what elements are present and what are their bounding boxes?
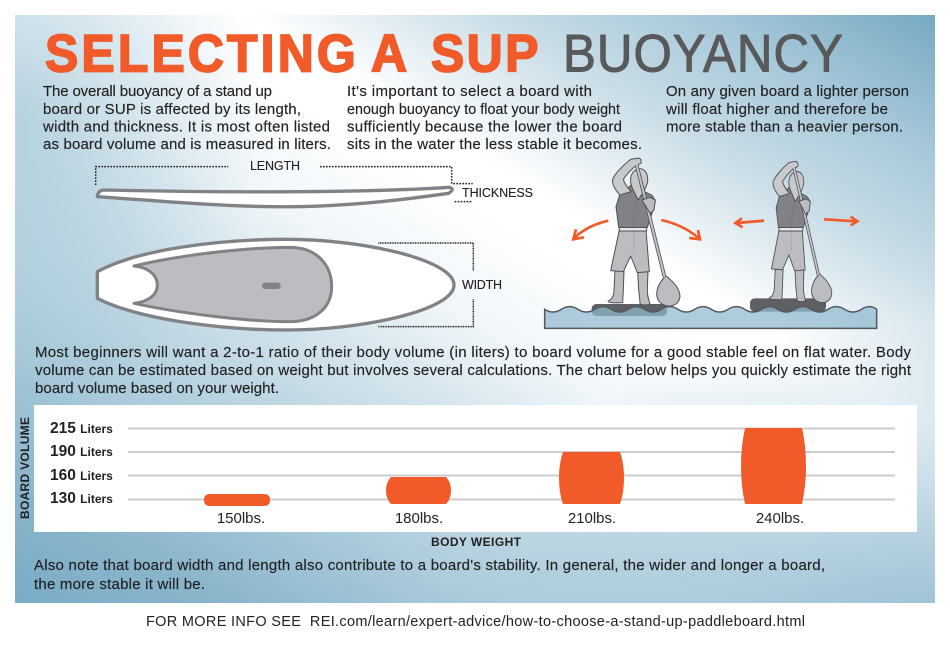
intro text: lighter person: will float higher and therefore be <box>665 101 888 118</box>
y axis title: BOARD VOLUME <box>18 417 32 519</box>
title: A <box>371 24 407 83</box>
water <box>545 307 877 328</box>
diagram: board top view with width: WIDTH <box>462 278 502 292</box>
y axis labels: 215 Liters <box>50 420 113 437</box>
arrows lighter paddler <box>735 217 857 227</box>
chart: board volume by body weight <box>18 405 917 532</box>
ratio paragraph: board volume based on your weight. <box>35 380 279 397</box>
title: SELECTING <box>45 24 356 83</box>
title: SUP <box>431 24 538 83</box>
board under heavier paddler <box>592 304 667 316</box>
diagram: board side view with length and thickness: THICKNESS <box>462 186 533 200</box>
bar 240 lbs <box>741 428 806 504</box>
closing note: the more stable it will be. <box>34 576 205 593</box>
board under lighter paddler <box>750 298 826 312</box>
intro text: lighter person: more stable than a heavier person. <box>666 118 903 136</box>
x axis labels: 180lbs. <box>395 510 443 527</box>
diagram: board top view with width <box>97 239 502 330</box>
intro text: overall buoyancy: width and thickness. It is most often listed <box>42 118 330 136</box>
ratio paragraph <box>35 344 912 397</box>
closing note: Also note that board width and length also contribute to a board's stability. In general, the wider and longer a board, <box>34 557 825 574</box>
ratio paragraph: volume can be estimated based on weight but involves several calculations. The chart below helps you quickly estimate the right <box>35 362 912 379</box>
intro text: enough buoyancy: It's important to select a board with <box>347 83 592 100</box>
diagram: board side view with length and thickness <box>96 159 533 207</box>
heavier paddler <box>608 158 680 306</box>
footer source line: FOR MORE INFO SEE REI.com/learn/expert-advice/how-to-choose-a-stand-up-paddleboard.html <box>146 614 805 630</box>
y axis labels <box>50 420 113 507</box>
intro text: overall buoyancy <box>42 83 331 153</box>
intro text: enough buoyancy <box>347 83 642 153</box>
intro text: overall buoyancy: as board volume and is measured in liters. <box>43 136 331 153</box>
x axis title: BODY WEIGHT <box>431 535 522 549</box>
x axis labels <box>217 510 804 527</box>
intro text: enough buoyancy: sufficiently because the lower the board <box>347 118 622 136</box>
arrows heavier paddler <box>573 220 700 239</box>
bar 150 lbs <box>204 494 270 506</box>
grid lines <box>128 428 895 500</box>
y axis labels: 160 Liters <box>50 467 113 484</box>
lighter paddler <box>769 161 832 303</box>
title: BUOYANCY <box>563 24 843 83</box>
illustration: paddlers on water with stability arrows <box>545 158 877 328</box>
intro text: lighter person: On any given board a lighter person <box>666 83 909 100</box>
closing note <box>34 557 825 593</box>
intro text: lighter person <box>665 83 909 136</box>
x axis labels: 150lbs. <box>217 510 265 527</box>
y axis labels: 190 Liters <box>50 443 113 460</box>
diagram: board side view with length and thickness: LENGTH <box>250 159 300 173</box>
intro text: enough buoyancy: sits in the water the less stable it becomes. <box>347 136 642 153</box>
x axis labels: 240lbs. <box>756 510 804 527</box>
title <box>45 24 843 83</box>
ratio paragraph: Most beginners will want a 2-to-1 ratio of their body volume (in liters) to board volume for a good stable feel on flat water. Body <box>35 344 912 361</box>
intro text: enough buoyancy: enough buoyancy to float your body weight <box>347 102 620 118</box>
intro text: overall buoyancy: The overall buoyancy of a stand up <box>43 83 272 100</box>
y axis labels: 130 Liters <box>50 490 113 507</box>
intro text: overall buoyancy: board or SUP is affected by its length, <box>43 101 301 118</box>
bar 210 lbs <box>559 452 624 504</box>
bar 180 lbs <box>386 477 451 504</box>
x axis labels: 210lbs. <box>568 510 616 527</box>
